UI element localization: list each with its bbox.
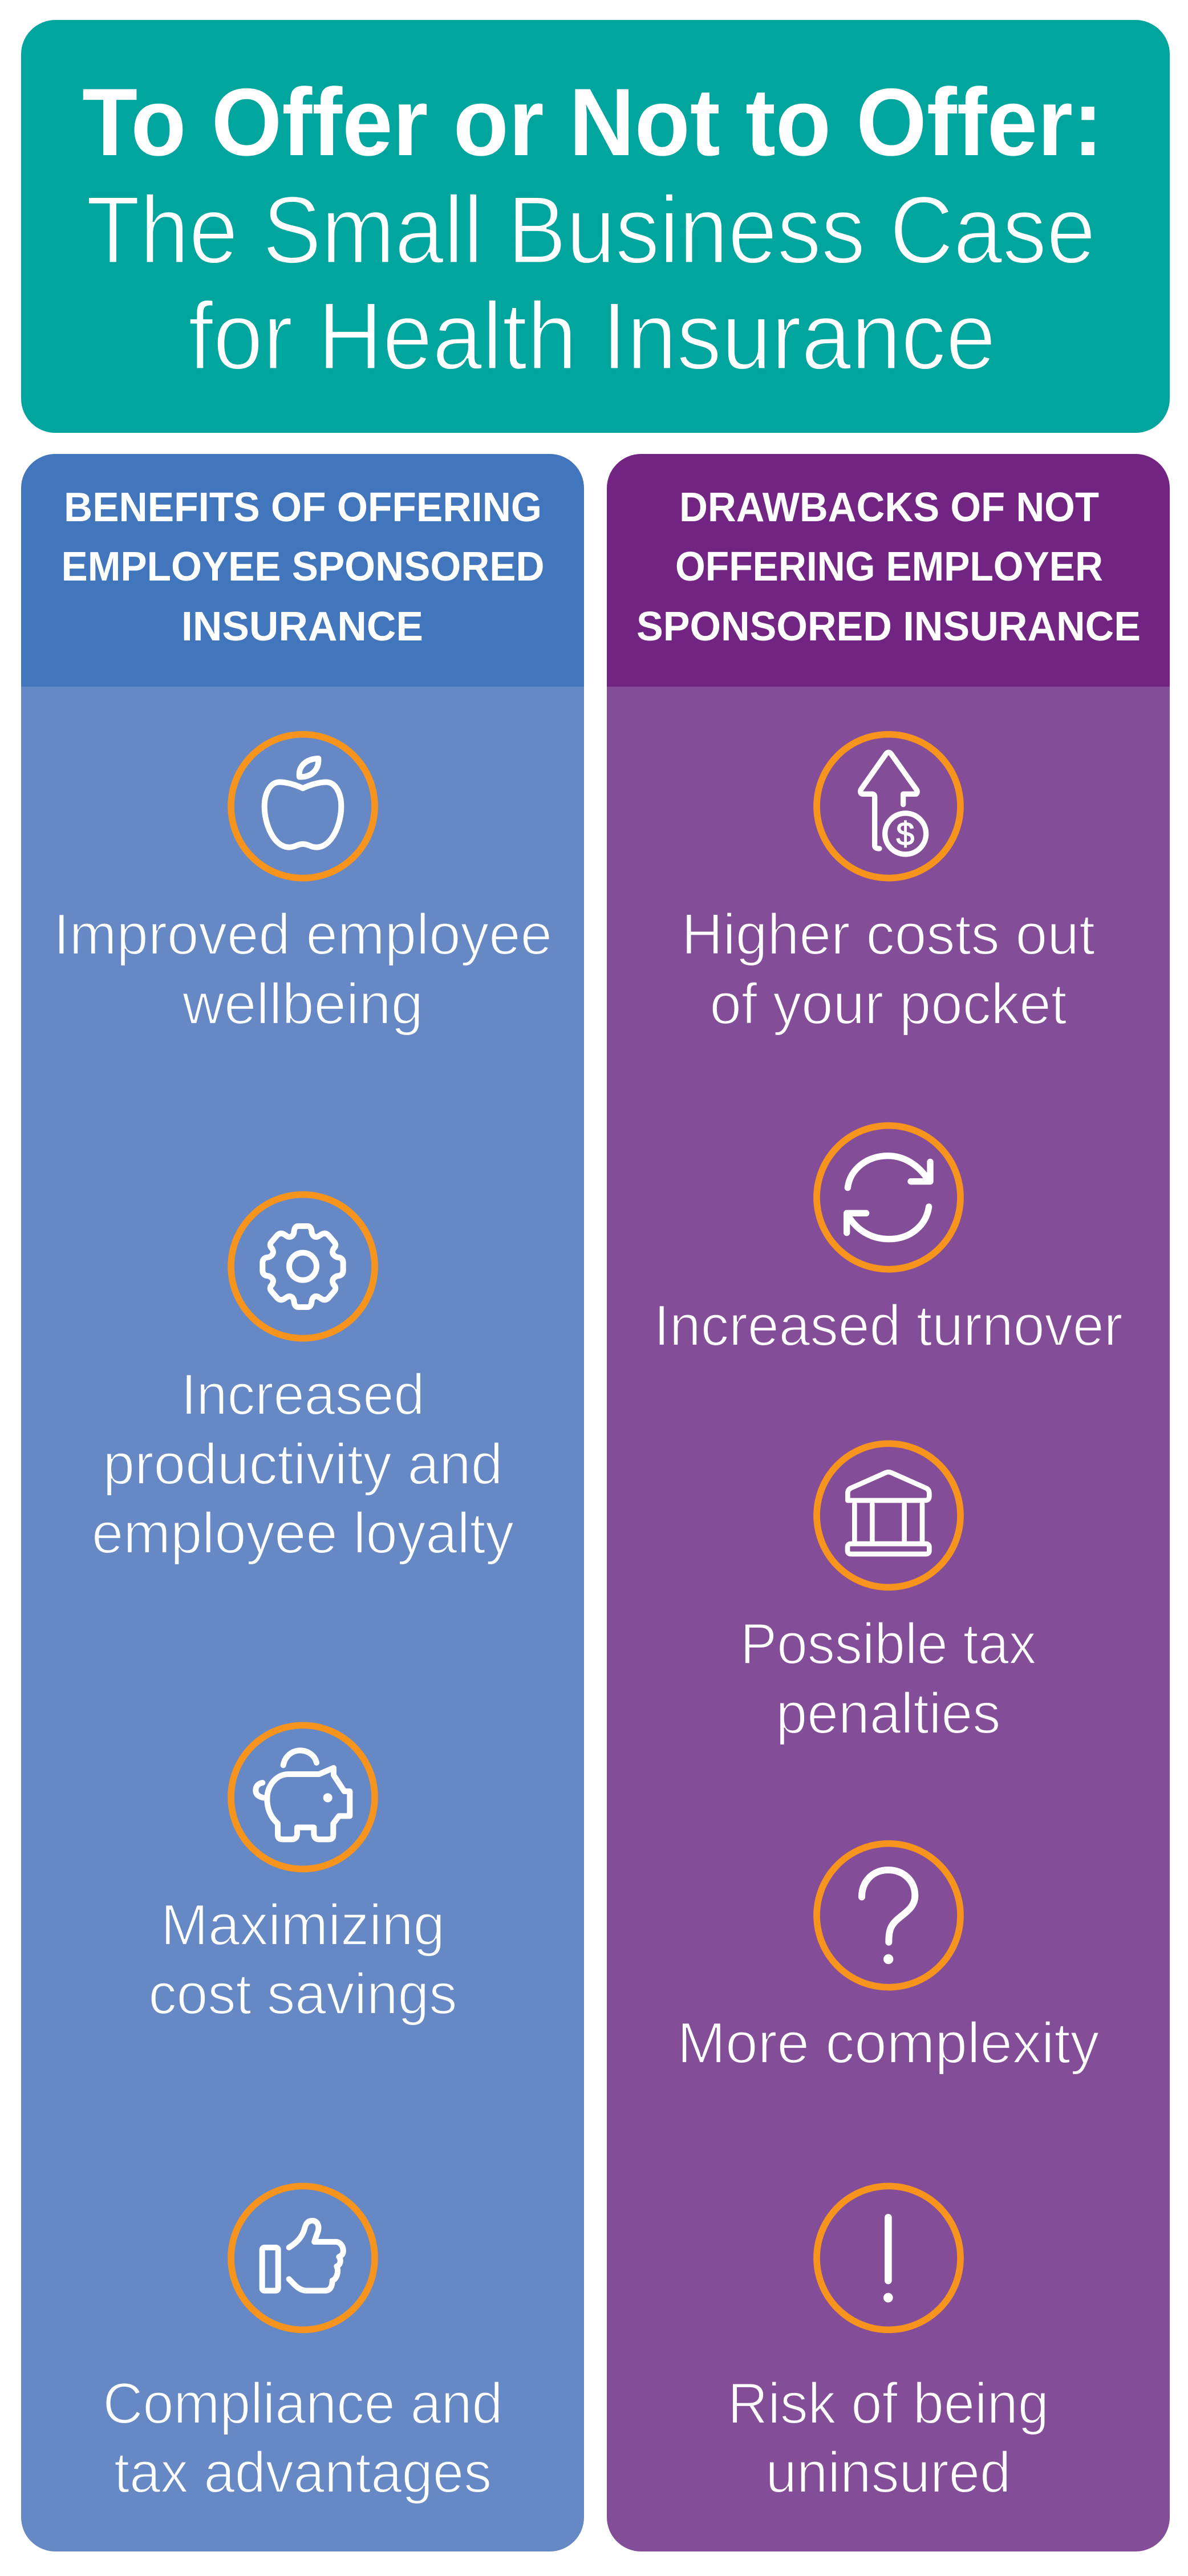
label: more complexity: More complexity [678,2011,1100,2075]
icon: arrow up with dollar coin: $ [896,816,914,852]
label: increased productivity and employee loyalty [92,1363,514,1565]
label: higher costs out of your pocket: of your pocket [709,972,1067,1036]
panel: benefits of offering [21,454,584,2551]
label: maximizing cost savings [148,1893,457,2026]
benefits panel header: EMPLOYEE SPONSORED [62,544,544,590]
label: compliance and tax advantages: Compliance and [103,2372,503,2436]
label: compliance and tax advantages [103,2372,503,2505]
label: improved employee wellbeing: Improved employee [54,903,552,967]
icon: question mark [817,1844,960,1987]
label: increased productivity and employee loyalty: productivity and [103,1433,503,1496]
label: risk of being uninsured: uninsured [765,2441,1011,2505]
icon: refresh arrows [817,1126,960,1269]
icon: government building [817,1443,960,1587]
icon: gear [231,1195,375,1338]
benefits panel header: INSURANCE [181,604,423,650]
label: risk of being uninsured: Risk of being [728,2372,1049,2436]
drawbacks panel header: DRAWBACKS OF NOT [679,485,1099,530]
benefits panel header: BENEFITS OF OFFERING [64,485,542,530]
drawbacks panel header: OFFERING EMPLOYER [675,544,1103,590]
label: possible tax penalties [740,1612,1036,1746]
label: compliance and tax advantages: tax advantages [114,2441,492,2505]
icon: piggy bank [231,1725,375,1869]
icon: arrow up with dollar coin [817,735,960,878]
drawbacks panel body [607,687,1170,2551]
panel: drawbacks of not offering [607,454,1170,2551]
title: bold heading line: To Offer or Not to Offer: [82,68,1103,176]
label: improved employee wellbeing: wellbeing [182,972,423,1036]
label: increased productivity and employee loyalty: employee loyalty [92,1502,514,1565]
label: possible tax penalties: penalties [776,1682,1000,1746]
title: subtitle line two: for Health Insurance [188,282,996,390]
icon: exclamation mark [817,2186,960,2330]
label: increased turnover: Increased turnover [654,1294,1122,1358]
benefits panel body [21,687,584,2551]
drawbacks panel header [607,454,1170,687]
label: increased productivity and employee loyalty: Increased [181,1363,424,1427]
label: maximizing cost savings: Maximizing [161,1893,445,1957]
label: maximizing cost savings: cost savings [148,1962,457,2026]
icon: thumbs up [231,2186,375,2330]
label: higher costs out of your pocket [682,903,1095,1036]
label: risk of being uninsured [728,2372,1049,2505]
icon: apple [231,735,375,878]
drawbacks panel header: SPONSORED INSURANCE [636,604,1141,650]
label: higher costs out of your pocket: Higher costs out [682,903,1095,967]
benefits panel header [21,454,584,687]
label: improved employee wellbeing [54,903,552,1036]
label: possible tax penalties: Possible tax [740,1612,1036,1676]
title banner [21,20,1170,433]
title: subtitle line one: The Small Business Case [86,176,1096,283]
